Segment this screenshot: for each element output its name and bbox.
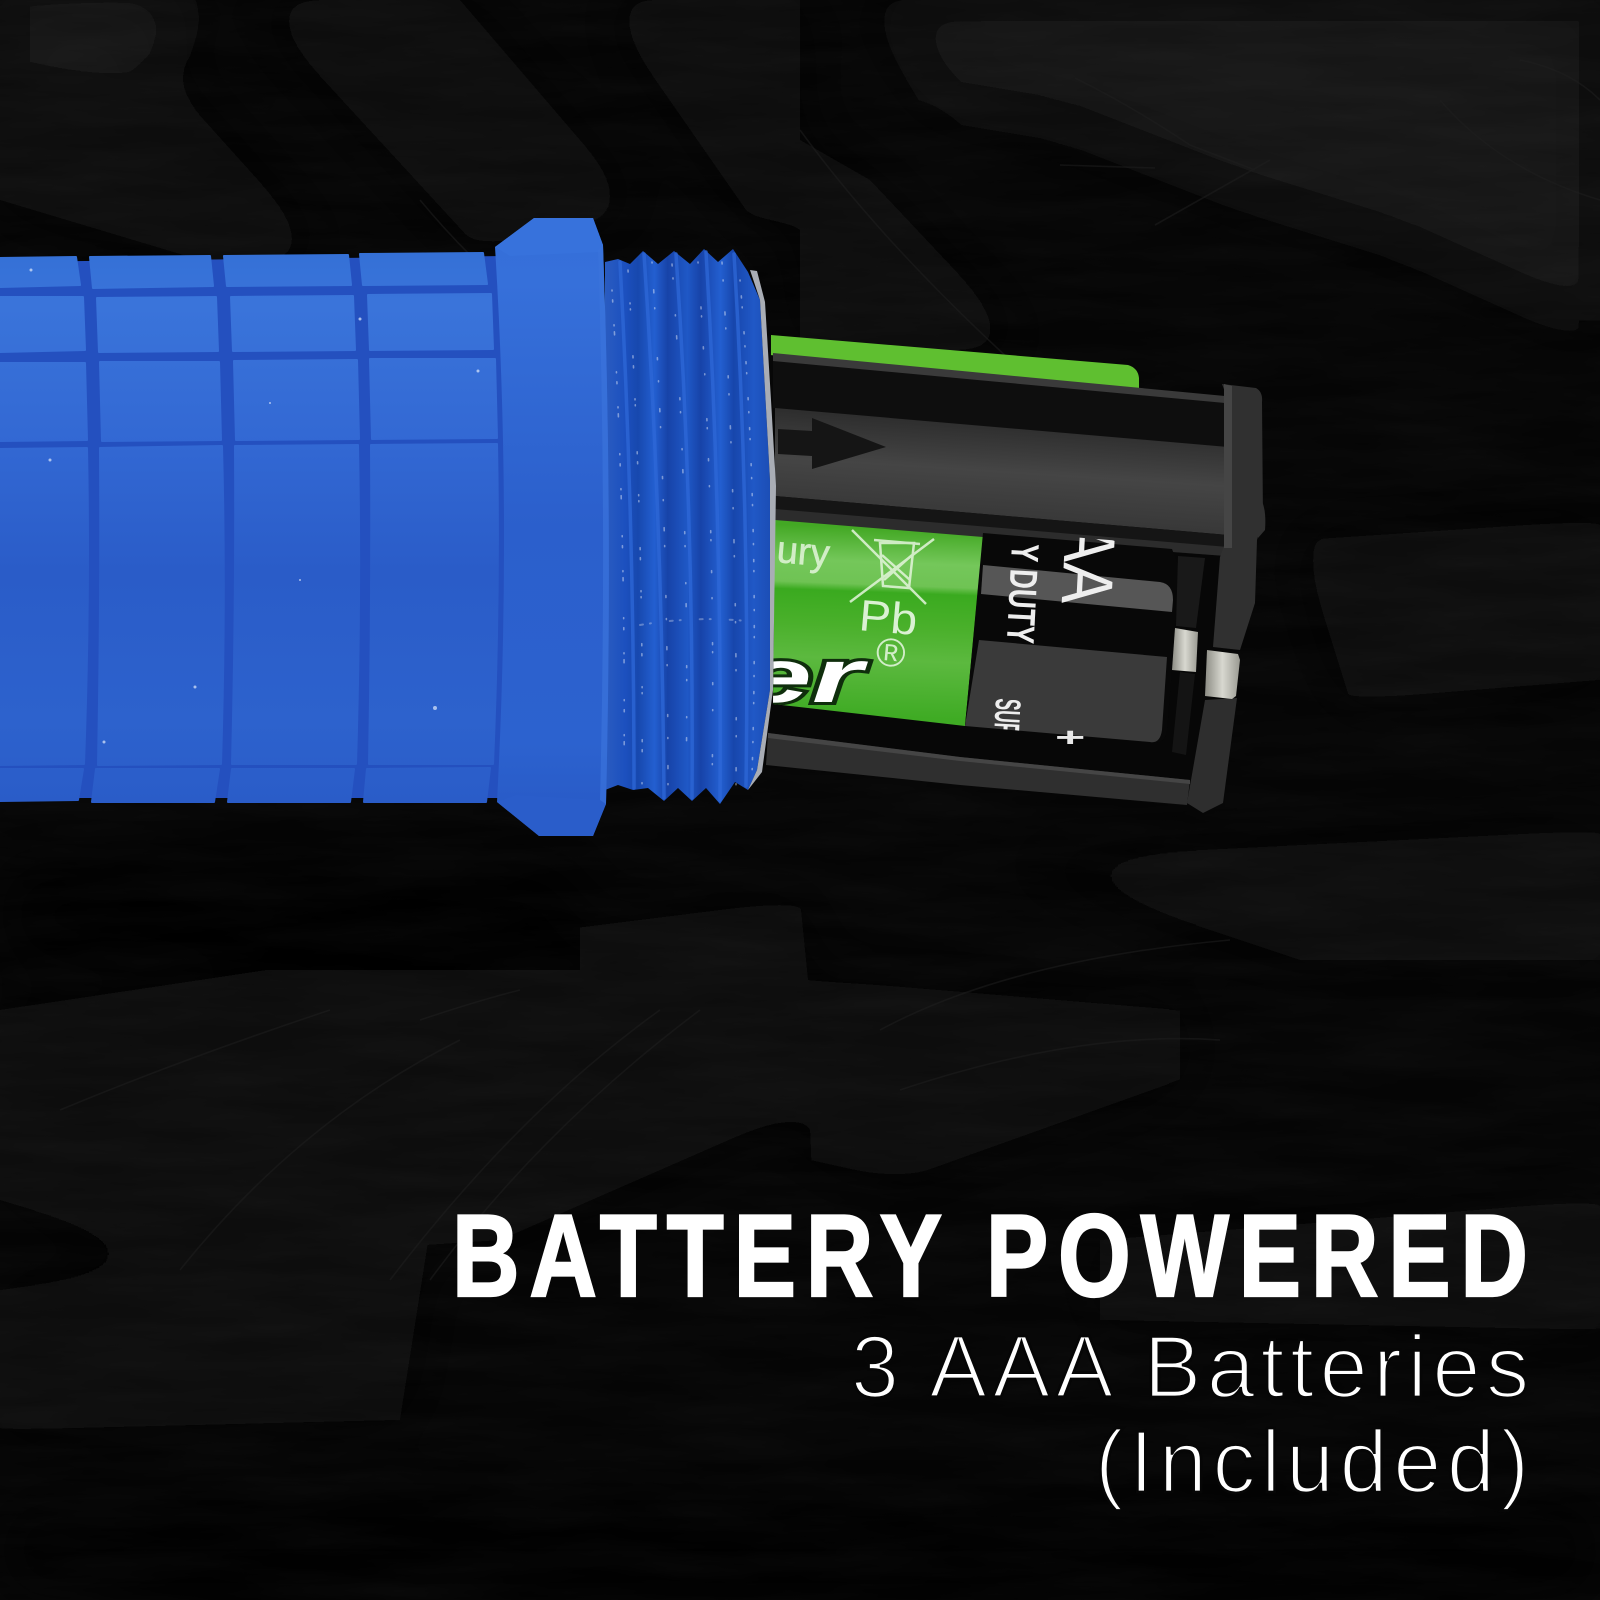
grip	[0, 253, 515, 802]
interior ribs	[1176, 556, 1205, 628]
label text: registered mark: ®	[874, 630, 907, 677]
terminal nub	[1172, 628, 1198, 672]
label text: er: er	[740, 634, 869, 718]
icon: crossed-out bin	[850, 530, 934, 604]
battery holder	[740, 335, 1265, 813]
green label	[773, 520, 983, 726]
subheading line 2: (Included)	[1095, 1413, 1529, 1511]
green battery top edge	[771, 335, 1139, 392]
collar	[495, 218, 609, 836]
label text: Pb: Pb	[857, 591, 919, 645]
thread section	[605, 249, 776, 804]
flashlight	[0, 218, 1265, 836]
label text: ury: ury	[775, 529, 831, 576]
cell text: DUTY: Y DUTY	[998, 543, 1046, 645]
holder backing	[766, 355, 1225, 810]
cap nub	[1258, 495, 1265, 538]
silver edge	[748, 270, 776, 790]
arrow	[778, 418, 886, 469]
battery	[740, 520, 1205, 755]
end cap	[1213, 384, 1263, 650]
black cell	[965, 533, 1173, 744]
cell text: plus: +	[1055, 723, 1085, 752]
bottom rail	[766, 733, 1190, 805]
metal contact tab	[1205, 650, 1240, 699]
upper rail	[773, 355, 1225, 447]
heading: BATTERY POWERED	[452, 1191, 1528, 1321]
cell text: SUF: SUF	[986, 698, 1029, 735]
subheading line 1: 3 AAA Batteries	[851, 1318, 1529, 1416]
cylinder	[775, 408, 1228, 535]
cell text: AA: AA	[1046, 520, 1130, 606]
lower rail	[773, 496, 1228, 556]
